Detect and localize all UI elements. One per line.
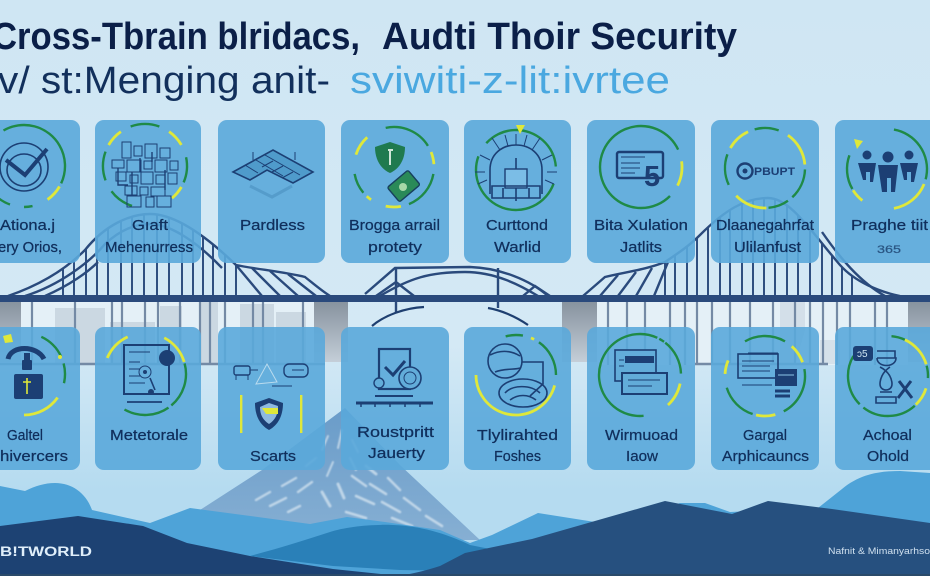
right arch hangers xyxy=(665,190,852,296)
icon: card with five xyxy=(617,152,663,193)
icon: check badge xyxy=(0,143,48,191)
label: Gargal xyxy=(743,427,787,444)
label: Metetorale xyxy=(110,427,188,444)
ring xyxy=(583,109,699,225)
label: Dlaanegahrfat xyxy=(716,217,815,234)
yellow bars xyxy=(240,395,302,433)
title: Cross-Tbrain blridacs, xyxy=(0,16,360,58)
icon: people group xyxy=(858,150,918,192)
subtitle: v/ st:Menging anit- xyxy=(0,60,330,102)
label: Tlylirahted xyxy=(477,427,558,444)
mountain xyxy=(200,408,480,540)
label: protety xyxy=(368,239,423,256)
ring xyxy=(87,108,203,224)
hanging arrow right xyxy=(488,308,528,325)
icon: shield and note xyxy=(375,142,420,202)
icon: shield xyxy=(255,398,283,430)
middle truss xyxy=(365,267,550,312)
icon: checked document on platform xyxy=(356,349,433,407)
label: Brogga arrail xyxy=(349,217,440,234)
ring xyxy=(460,319,572,431)
ring xyxy=(338,111,450,223)
card bottom 8 xyxy=(831,319,930,470)
card bottom 3 xyxy=(218,327,325,470)
card top 7 xyxy=(709,112,821,263)
ring xyxy=(88,317,202,431)
card top 4 xyxy=(338,111,450,263)
icon: logo mark: PBUPT xyxy=(754,166,795,178)
footer credit: Nafnit & Mimanyarhso xyxy=(828,546,930,557)
label: Achoal xyxy=(863,427,912,444)
label: Wirmuoad xyxy=(605,427,678,444)
label: hivercers xyxy=(0,448,68,465)
card top 3 xyxy=(218,120,325,263)
skyline behind the bridge xyxy=(55,302,840,365)
label: Curttond xyxy=(486,217,548,234)
right arch cables xyxy=(583,198,900,296)
label: Bita Xulation xyxy=(594,217,688,234)
card bottom 1 xyxy=(0,317,81,470)
label: Foshes xyxy=(494,448,541,465)
ring xyxy=(0,110,80,222)
label: Pardless xyxy=(240,217,305,234)
label: Galtel xyxy=(7,427,43,444)
card bottom 2 xyxy=(88,317,202,470)
icon: document with gear xyxy=(124,345,175,402)
hanging arrow left xyxy=(372,307,424,326)
label: Jatlits xyxy=(620,239,662,256)
label: Iaow xyxy=(626,448,658,465)
label: Warlid xyxy=(494,239,541,256)
card top 6 xyxy=(583,109,699,263)
card bottom 7 xyxy=(709,320,821,470)
label: Roustpritt xyxy=(357,424,435,441)
ring xyxy=(460,114,572,226)
label: 365 xyxy=(877,244,901,256)
icon: tools top xyxy=(234,364,308,386)
card top 5 xyxy=(460,114,572,263)
label: Arphicauncs xyxy=(722,448,809,465)
left navy hill xyxy=(0,516,400,576)
card bottom 4 xyxy=(341,327,449,470)
icon: lock person xyxy=(8,348,44,399)
left arch hangers xyxy=(62,216,237,295)
ring xyxy=(0,317,81,431)
card bottom 5 xyxy=(460,319,572,470)
label: Ohold xyxy=(867,448,909,465)
ring xyxy=(709,320,821,432)
ring xyxy=(831,113,930,225)
label: Jauerty xyxy=(368,445,426,462)
label: Gıaft xyxy=(132,217,169,234)
label: Mehenurress xyxy=(105,239,193,256)
icon: isometric keyboard xyxy=(233,150,313,197)
icon: card with five: 5 xyxy=(644,161,660,193)
deck xyxy=(0,295,930,302)
hills xyxy=(0,471,930,576)
subtitle highlight: sviwiti-z-lit:ivrtee xyxy=(350,60,670,102)
icon: stacked documents xyxy=(615,350,667,394)
icon: document stack xyxy=(738,353,797,396)
card top 1 xyxy=(0,110,80,263)
label: Scarts xyxy=(250,448,296,465)
icon: globe, mug and bowl xyxy=(488,344,547,407)
card top 2 xyxy=(87,108,203,263)
ring xyxy=(831,319,930,433)
header xyxy=(0,16,737,102)
under-deck hangers xyxy=(0,302,887,365)
icon: dome with rays xyxy=(475,134,557,201)
card bottom 6 xyxy=(582,317,698,470)
icon: circuit map xyxy=(112,142,178,207)
ring xyxy=(709,112,821,224)
pale band under deck xyxy=(21,302,908,365)
gray bridge towers xyxy=(0,302,930,362)
icon: logo mark xyxy=(738,164,795,178)
footer logo: B!TWORLD xyxy=(0,544,92,559)
centre blue hill xyxy=(250,525,510,571)
light far hills xyxy=(0,471,930,576)
ring xyxy=(582,317,698,433)
label: Ulilanfust xyxy=(734,239,802,256)
left arch cables xyxy=(8,214,330,296)
title right part: Audti Thoir Security xyxy=(382,16,737,58)
label: Ationa.j xyxy=(0,217,55,234)
base line xyxy=(0,574,930,576)
icon: tag, hourglass and tools xyxy=(853,346,912,403)
card top 8 xyxy=(831,113,930,263)
bridge xyxy=(0,190,930,365)
right navy range xyxy=(400,501,930,576)
icon: tag, hourglass and tools: ↄ5 xyxy=(857,349,868,360)
label: Praghe tiit xyxy=(851,217,929,234)
